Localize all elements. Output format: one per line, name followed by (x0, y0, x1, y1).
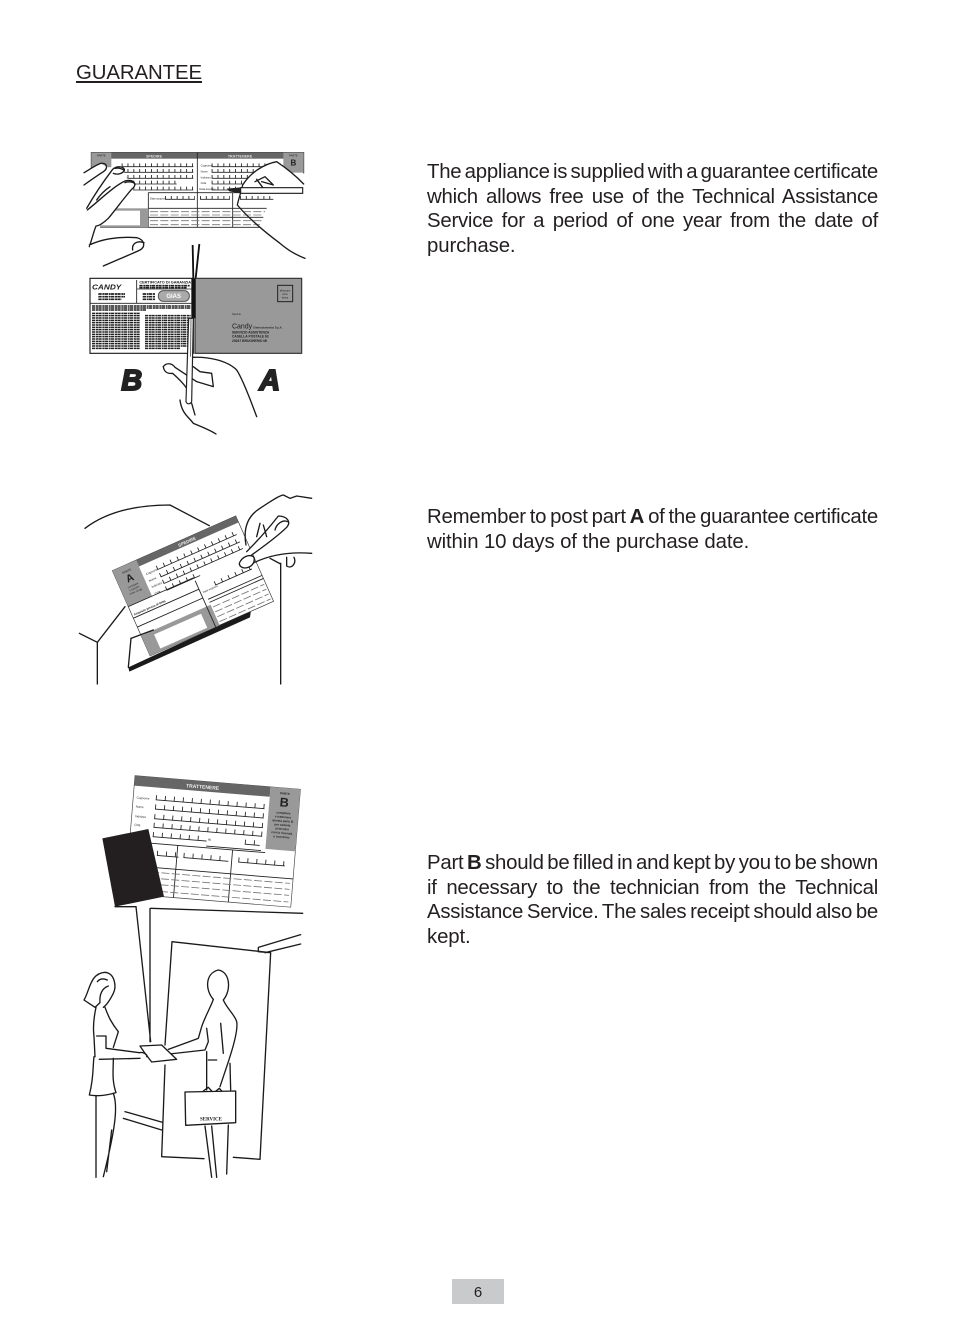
certificate with parts A and B (90, 278, 302, 353)
text block: guarantee certificate: which allows free use of the Technical Assistance (427, 186, 878, 208)
part B card: Nome (136, 805, 144, 809)
woman (84, 972, 140, 1177)
part B card: TRATTENERE (186, 783, 220, 792)
text block: post part A: within 10 days of the purchase date. (427, 530, 749, 552)
part B card: compilare (276, 810, 291, 816)
part B card: Indirizzo (135, 814, 147, 819)
part A card: Indirizzo (151, 581, 163, 589)
postbox slot (128, 610, 251, 672)
service briefcase (185, 1087, 236, 1125)
illustration: posting part A (79, 495, 312, 684)
certificate with parts A and B: SERVIZIO ASSISTENZA (232, 331, 270, 335)
guarantee form (91, 153, 304, 227)
part A card: Nome (148, 576, 157, 583)
part B card: B (279, 795, 289, 810)
part B card: o scontrino (273, 834, 290, 840)
part A card: A (124, 571, 136, 586)
part A card: e spedire (129, 584, 141, 592)
page number (452, 1279, 504, 1304)
certificate with parts A and B: Spett.le (232, 312, 242, 316)
guarantee form: Indirizzo (201, 175, 211, 179)
part B card: al tecnico (275, 826, 289, 831)
icon: scissors blades (193, 244, 199, 278)
text block: guarantee certificate: Service for a period of one year from the date of (427, 210, 878, 232)
guarantee form: B (290, 158, 296, 167)
guarantee form: PARTE (97, 154, 106, 158)
part A card: Cognome (145, 567, 159, 576)
certificate with parts A and B: 20047 BRUGHERIO MI (232, 339, 267, 343)
text block: keep part B: kept. (427, 926, 471, 948)
text block: post part A: Remember to post part A of the guarantee certificate (427, 506, 878, 528)
guarantee form: Città (201, 181, 207, 185)
text block: guarantee certificate: The appliance is supplied with a guarantee certificate (427, 161, 878, 183)
label: part A: A (258, 365, 280, 397)
text block: post part A (427, 506, 878, 552)
illustration: part B card (102, 776, 303, 913)
guarantee form: Data acquisto (150, 196, 167, 200)
text block: keep part B: if necessary to the technician from the Technical (427, 876, 878, 898)
certificate with parts A and B: Elettrodomestici S.p.A. (253, 325, 283, 329)
certificate with parts A and B: CASELLA POSTALE 63 (232, 335, 269, 339)
text block: keep part B (427, 852, 878, 948)
certificate with parts A and B: Candy (232, 323, 253, 330)
slot front edge (131, 630, 153, 638)
certificate with parts A and B: affrancare (280, 290, 291, 293)
part B card: e trattenere (275, 814, 292, 820)
text block: guarantee certificate: purchase. (427, 234, 515, 256)
illustration: filling in and cutting the certificate (84, 153, 305, 434)
room and door (123, 907, 301, 1159)
part B card: questa parte B (272, 818, 294, 824)
heading: guarantee: GUARANTEE (76, 62, 202, 84)
guarantee form: TRATTENERE (228, 154, 253, 158)
icon: hand holding card (239, 495, 312, 568)
icon: left hand on form (84, 163, 144, 266)
text block: guarantee certificate (427, 161, 878, 256)
illustration: handing over to the technician (84, 907, 301, 1177)
service briefcase: SERVICE (200, 1117, 223, 1122)
icon: hand with scissors (163, 318, 257, 434)
part B card (125, 776, 300, 907)
part A card: Acquisto presso di Ditta (133, 599, 167, 616)
certificate with parts A and B: lettera (282, 296, 289, 299)
guarantee form: Data acquisto (199, 187, 216, 191)
appliance outline (79, 505, 281, 684)
sales receipt black card (102, 829, 164, 907)
part A card: PARTE (122, 567, 132, 575)
guarantee form: SPEDIRE (146, 154, 163, 158)
certificate with parts A and B: CANDY (92, 284, 123, 291)
part B card: per esibirla (274, 822, 291, 828)
page number: 6 (474, 1284, 482, 1301)
part B card: N. (208, 838, 212, 842)
part B card: PARTE (280, 791, 290, 796)
guarantee form: Cognome (201, 164, 213, 168)
part A card: Data acquisto (202, 584, 219, 594)
part A card: SPEDIRE (177, 536, 197, 548)
part B card: con la ricevuta (271, 830, 293, 836)
icon: right hand holding pen (227, 162, 305, 258)
part B card: Cognome (136, 796, 150, 801)
text block: keep part B: Assistance Service. The sales receipt should also be (427, 901, 878, 923)
wall lines (115, 907, 303, 913)
technician (168, 970, 237, 1177)
part A card: entro 10 gg (129, 587, 143, 596)
part A card: Città (154, 589, 161, 596)
certificate with parts A and B: CERTIFICATO DI GARANZIA (139, 281, 192, 285)
part B card: Città (134, 823, 141, 827)
certificate with parts A and B: come (282, 294, 289, 296)
part A card: compilare (127, 581, 140, 589)
part A card (112, 516, 274, 656)
certificate with parts A and B: GIAS (166, 294, 181, 300)
handed document (139, 1045, 177, 1062)
label: part B: B (121, 365, 142, 397)
guarantee form: PARTE (289, 154, 298, 158)
guarantee form: Nome (201, 169, 208, 173)
text block: keep part B: Part B should be filled in and kept by you to be shown (427, 852, 878, 874)
